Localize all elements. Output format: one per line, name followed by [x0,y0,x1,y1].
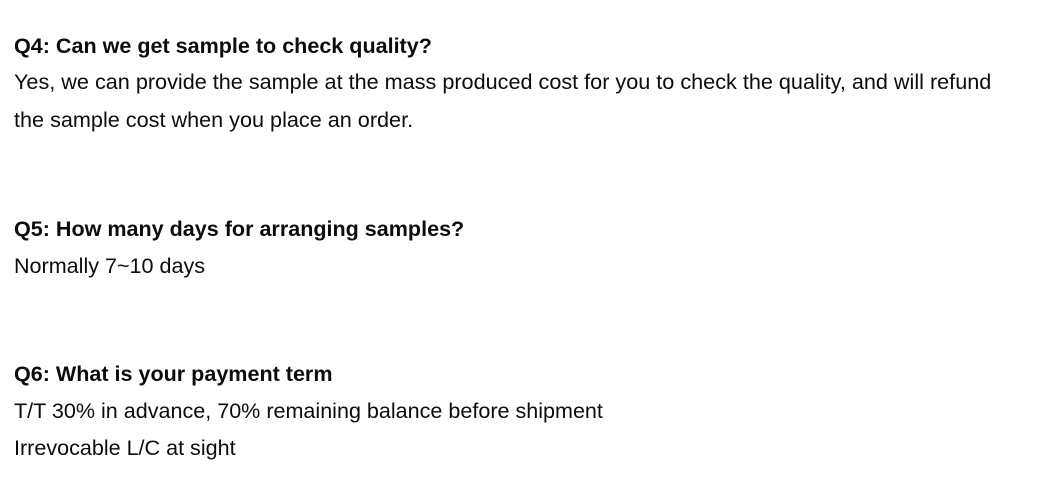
text block: Q4 answer: Yes, we can provide the sample at the mass produced cost for you to check the quality, and will refund [14,69,991,94]
heading: Q4: Q4: Can we get sample to check quality? [14,33,432,58]
heading: Q5: Q5: How many days for arranging samples? [14,216,464,241]
text block: Q6 answer [14,398,603,460]
text block: Q6 answer: Irrevocable L/C at sight [14,435,236,460]
text block: Q5 answer: Normally 7~10 days [14,253,205,278]
text block: Q4 answer: the sample cost when you place an order. [14,107,413,132]
text block: Q6 answer: T/T 30% in advance, 70% remaining balance before shipment [14,398,603,423]
heading: Q6: Q6: What is your payment term [14,361,332,386]
text block: Q4 answer [14,69,991,132]
